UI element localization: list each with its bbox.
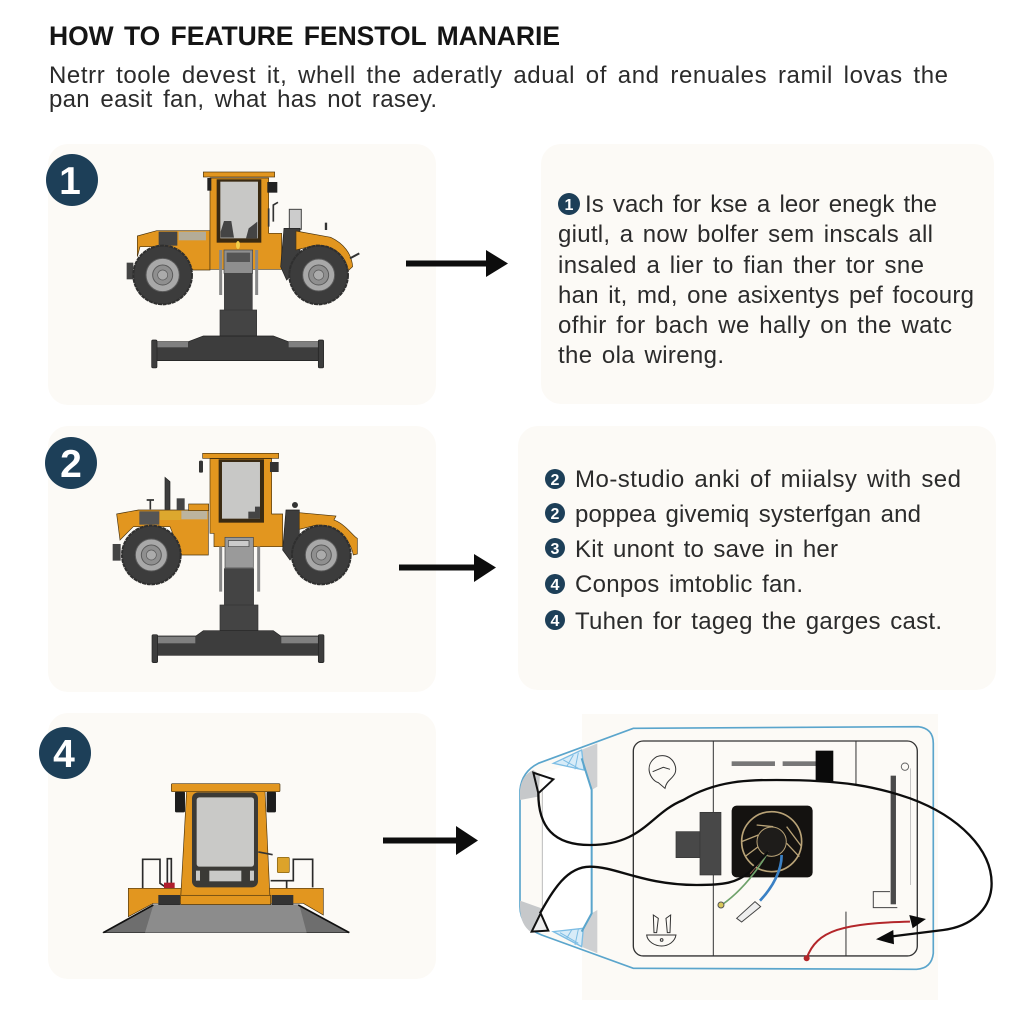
list item 1: 2 (551, 472, 560, 489)
panel: step 1 text (541, 144, 994, 404)
badge: number 4 (39, 727, 91, 779)
badge: number 1: 1 (59, 160, 81, 203)
list item 3: Kit unont to save in her (575, 536, 838, 563)
title: HOW TO FEATURE FENSTOL MANARIE (49, 21, 560, 51)
list item 5: 4 (551, 613, 560, 630)
list item 2: 2 (551, 506, 560, 523)
left end cap (520, 743, 597, 953)
motor (676, 812, 721, 875)
panel: step 3 illustration (48, 713, 436, 979)
arrowheads (876, 915, 926, 944)
list item 2: poppea givemiq systerfgan and (575, 501, 921, 528)
list item 4: 4 (551, 577, 560, 594)
panel: step 2 illustration (48, 426, 436, 692)
intro text: Netrr toole devest it, whell the aderatly adual of and renuales ramil lovas the (49, 62, 948, 89)
list item 1: Mo-studio anki of miialsy with sed (575, 466, 961, 493)
icon: tractor 2 (113, 453, 357, 663)
rail (873, 763, 911, 908)
badge: number 2: 2 (60, 443, 82, 486)
icon: front-view loader (103, 784, 349, 933)
intro text (49, 62, 948, 113)
icon: speech bubble (649, 756, 676, 788)
housing outline (520, 727, 933, 969)
list item 4: Conpos imtoblic fan. (575, 571, 803, 598)
top bars (732, 751, 833, 782)
badge: number 2 (45, 437, 97, 489)
badge: number 1 (46, 154, 98, 206)
bullet 1: 1 (565, 197, 574, 214)
wiring diagram (520, 714, 992, 1000)
list item 3: 3 (551, 541, 560, 558)
text block: step 1 (558, 191, 974, 369)
text block: step 1: giutl, a now bolfer sem inscals all (558, 221, 933, 248)
fan (732, 806, 813, 877)
text block: step 1: insaled a lier to fian ther tor sne (558, 252, 924, 279)
coloured wires (718, 852, 782, 922)
arrow 1 (406, 250, 508, 277)
list item 5: Tuhen for tageg the garges cast. (575, 608, 942, 635)
text block: step 1: the ola wireng. (558, 342, 724, 369)
panel: step 1 illustration (48, 144, 436, 405)
connector triangles (532, 773, 553, 932)
badge: number 4: 4 (53, 733, 75, 776)
arrow 2 (399, 554, 496, 582)
inner enclosure (633, 741, 917, 956)
panel: step 2 text (518, 426, 996, 690)
text block: step 1: ofhir for bach we hally on the watc (558, 312, 952, 339)
icon: bowl (647, 915, 676, 946)
text block: step 1: han it, md, one asixentys pef focourg (558, 282, 974, 309)
text block: step 2 list (545, 466, 961, 635)
arrow 3 (383, 826, 478, 855)
text block: step 1: Is vach for kse a leor enegk the (585, 191, 937, 218)
icon: tractor 1 (127, 172, 359, 368)
intro text: pan easit fan, what has not rasey. (49, 86, 437, 113)
red wire (804, 922, 910, 961)
black wires (538, 780, 992, 937)
bullet 1 (558, 193, 580, 215)
